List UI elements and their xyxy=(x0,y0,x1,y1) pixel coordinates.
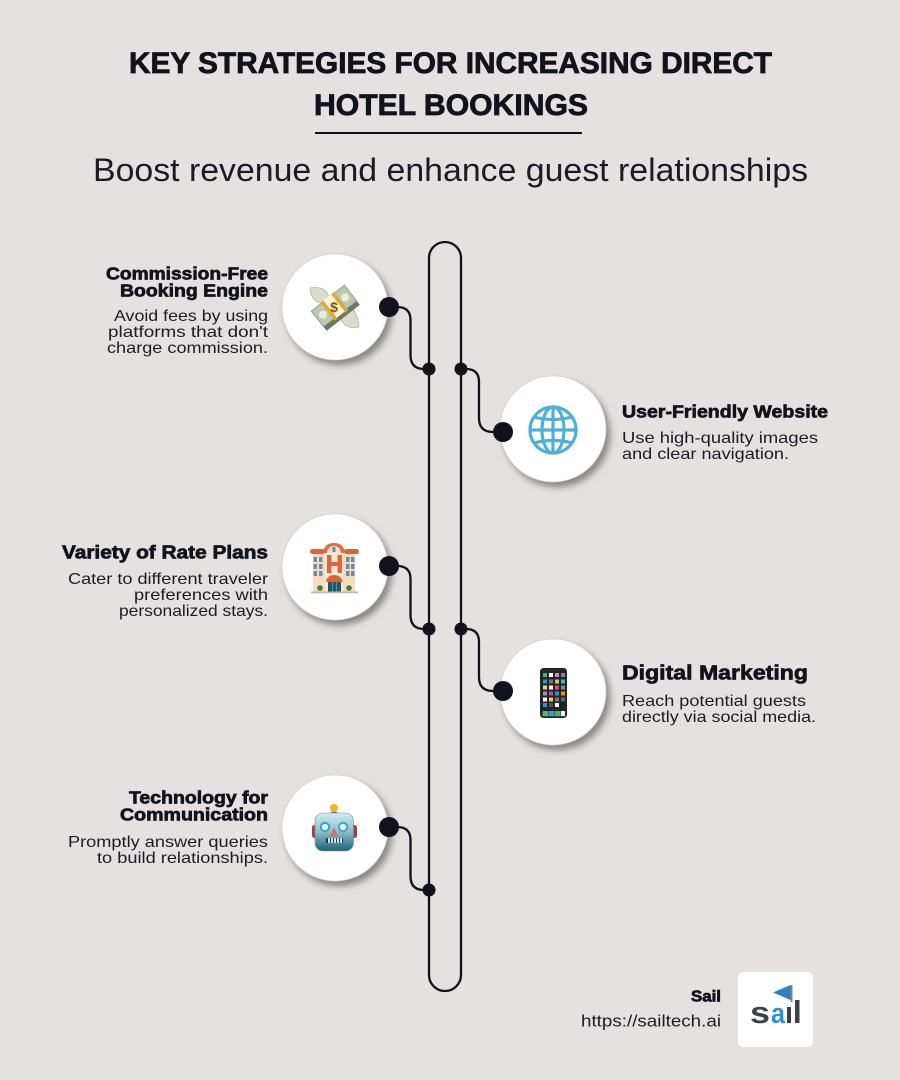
heading: technology xyxy=(120,788,268,824)
connector dot xyxy=(379,817,399,837)
heading: digital marketing: Digital Marketing xyxy=(622,662,808,684)
connector dot xyxy=(493,681,513,701)
timeline junction dots xyxy=(422,362,468,896)
text: commission-free description: platforms that don't xyxy=(108,324,269,341)
icon: globe xyxy=(530,407,576,453)
icon: money with wings xyxy=(310,284,360,331)
text: website description: Use high-quality images xyxy=(622,430,818,447)
connector: technology xyxy=(389,827,429,890)
icon circle xyxy=(282,775,388,881)
title: KEY STRATEGIES FOR INCREASING DIRECT xyxy=(129,47,772,80)
footer: sail logo xyxy=(738,972,813,1047)
text: marketing description: directly via social media. xyxy=(622,709,816,726)
footer: sail logo: s xyxy=(750,995,770,1030)
text: rate plans description: Cater to different traveler xyxy=(68,571,269,588)
footer: sail logo: a xyxy=(771,998,786,1030)
footer: brand text xyxy=(581,988,721,1030)
text: technology description: to build relationships. xyxy=(97,850,268,867)
connector: website xyxy=(461,369,503,432)
connector: marketing xyxy=(461,629,503,691)
text: website description: and clear navigation. xyxy=(622,446,789,463)
text: commission-free description: Avoid fees by using xyxy=(114,308,268,325)
connector dot xyxy=(379,297,399,317)
text: rate plans description: personalized stays. xyxy=(119,603,268,620)
text: marketing description: Reach potential guests xyxy=(622,693,806,710)
text: commission-free description xyxy=(107,308,269,357)
icon circle xyxy=(500,639,606,745)
icon circle xyxy=(282,514,388,620)
heading: commission-free xyxy=(106,264,268,300)
connector dot xyxy=(493,422,513,442)
connector dot xyxy=(379,556,399,576)
title xyxy=(129,47,772,122)
heading: technology: Communication xyxy=(120,804,268,824)
panel: technology for communication xyxy=(68,775,399,881)
text: technology description xyxy=(68,834,268,867)
connector: commission-free xyxy=(389,307,429,369)
icon: money with wings: $ xyxy=(330,299,338,315)
title: HOTEL BOOKINGS xyxy=(314,89,588,122)
title underline xyxy=(315,132,582,134)
text: website description xyxy=(622,430,818,463)
text: rate plans description xyxy=(68,571,269,620)
heading: user-friendly website: User-Friendly Website xyxy=(622,402,828,422)
central timeline track xyxy=(429,242,461,991)
connector: rate plans xyxy=(389,566,429,629)
heading: technology: Technology for xyxy=(129,788,268,808)
icon: robot xyxy=(312,804,357,851)
icon: hotel xyxy=(310,543,359,593)
panel: digital marketing xyxy=(493,639,816,745)
text: rate plans description: preferences with xyxy=(134,587,268,604)
footer: brand text: https://sailtech.ai xyxy=(581,1012,721,1030)
text: technology description: Promptly answer queries xyxy=(68,834,268,851)
heading: commission-free: Booking Engine xyxy=(120,280,268,300)
heading: commission-free: Commission-Free xyxy=(106,264,268,284)
icon: mobile phone xyxy=(540,668,567,718)
icon circle xyxy=(500,376,606,482)
panel: user-friendly website xyxy=(493,376,828,482)
subtitle: Boost revenue and enhance guest relationships xyxy=(93,152,808,188)
text: marketing description xyxy=(622,693,816,726)
panel: variety of rate plans xyxy=(62,514,399,620)
panel: commission-free booking engine xyxy=(106,254,399,360)
heading: rate plans: Variety of Rate Plans xyxy=(62,542,268,562)
icon circle xyxy=(282,254,388,360)
text: commission-free description: charge commission. xyxy=(107,340,268,357)
footer: brand text: Sail xyxy=(691,988,721,1006)
